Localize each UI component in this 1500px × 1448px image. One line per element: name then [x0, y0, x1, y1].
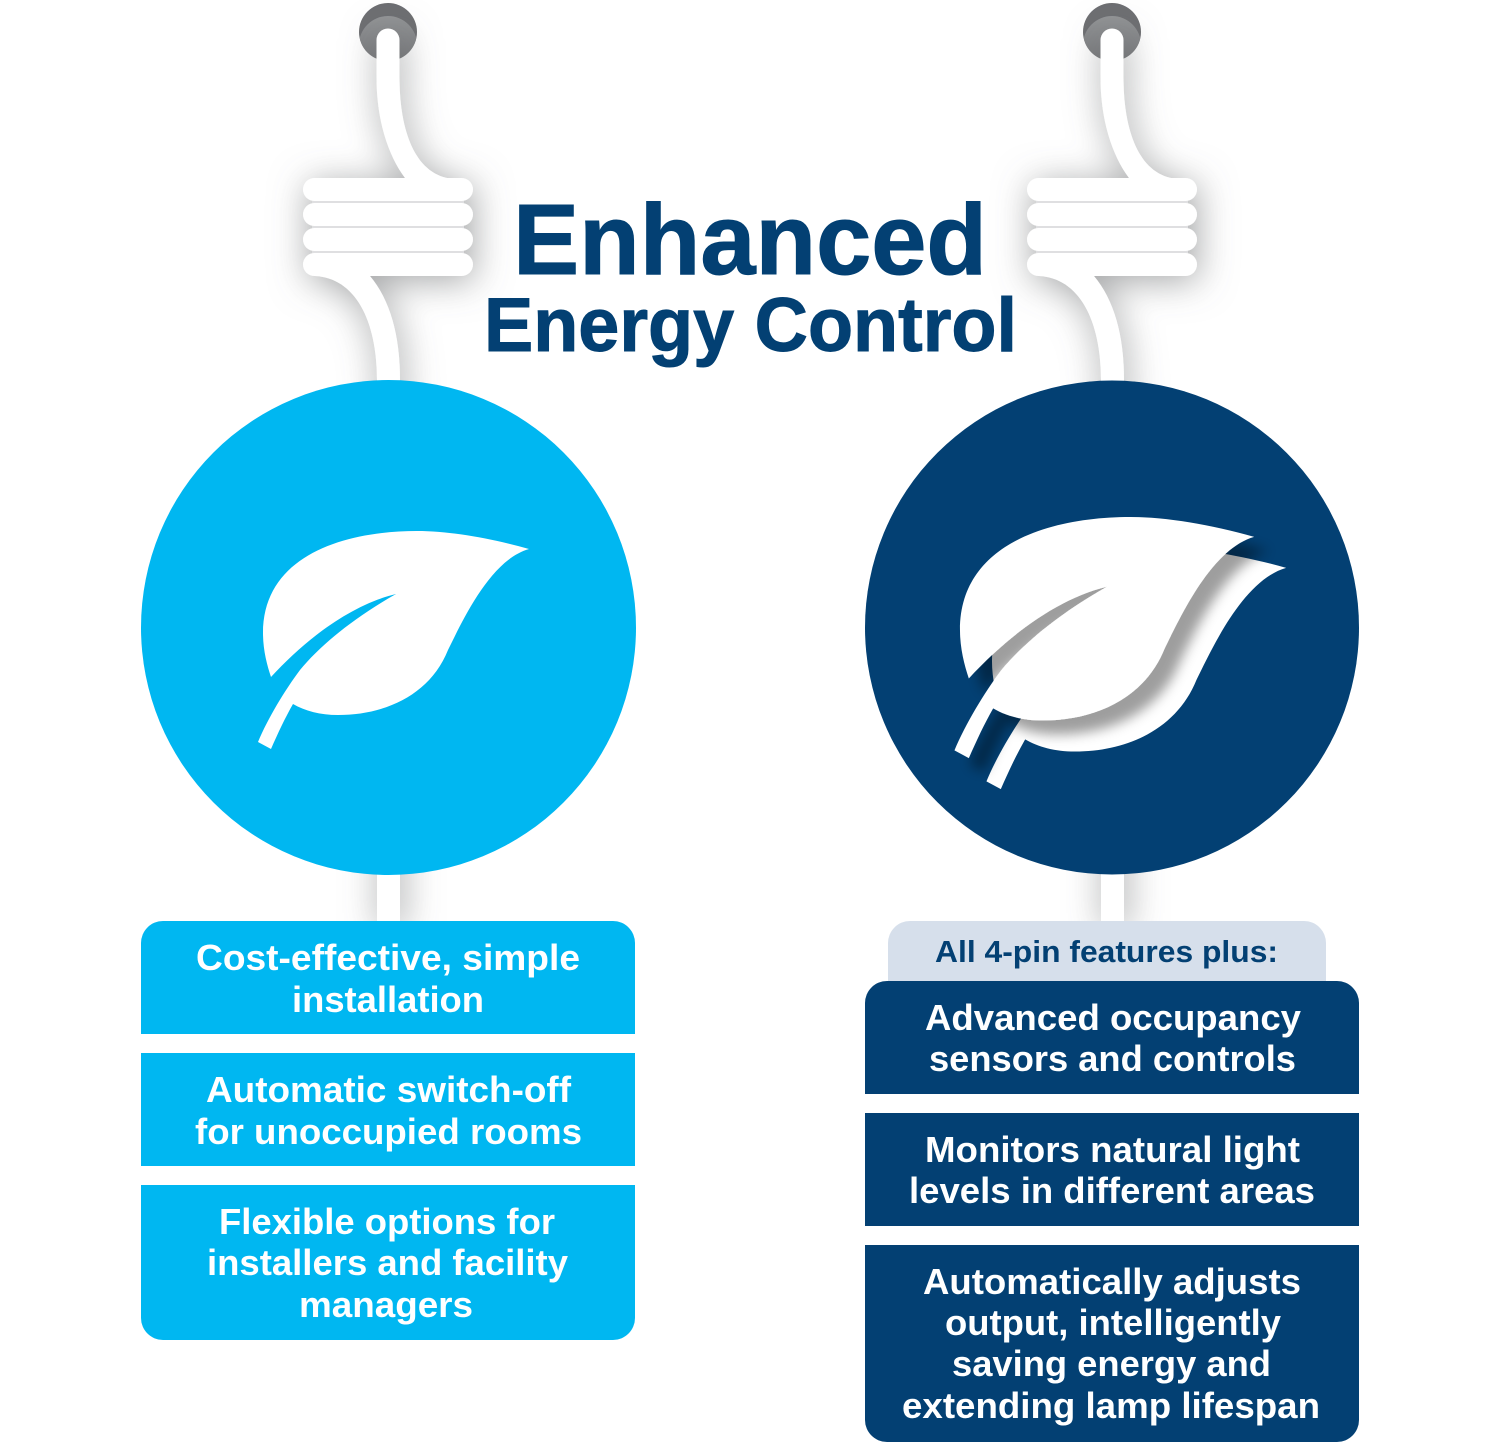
left circle: [141, 380, 636, 875]
right wire and coil: [1027, 29, 1197, 925]
left wire and coil: [303, 29, 473, 925]
right box 2: Monitors natural light: [925, 1129, 1300, 1170]
left box 1: Cost-effective, simple: [196, 937, 580, 978]
left box 3: [141, 1185, 635, 1340]
tab: all 4-pin features: All 4-pin features plus:: [935, 934, 1278, 969]
title line: Energy Control: Energy Control: [484, 283, 1017, 368]
left feature column: [141, 921, 635, 1340]
right circle: [865, 380, 1359, 874]
right box 3: Automatically adjusts: [923, 1261, 1301, 1302]
right box 3: saving energy and: [952, 1343, 1271, 1384]
left hanging wire: [303, 3, 473, 925]
title: [484, 184, 1017, 368]
left box 2: [141, 1053, 635, 1166]
left wall pin: [359, 3, 417, 58]
tab: all 4-pin features: [888, 921, 1326, 982]
back leaf: [986, 548, 1286, 789]
left box 3: Flexible options for: [219, 1201, 555, 1242]
right box 3: output, intelligently: [945, 1302, 1281, 1343]
title line: Enhanced: Enhanced: [513, 184, 987, 296]
left box 3: managers: [299, 1284, 473, 1325]
right circle with double leaf: [865, 380, 1359, 874]
right feature column: [865, 921, 1359, 1442]
left box 2: for unoccupied rooms: [195, 1111, 582, 1152]
left circle with single leaf: [141, 380, 636, 875]
right box 2: [865, 1113, 1359, 1226]
icon: double leaf: [954, 517, 1286, 789]
right box 1: sensors and controls: [929, 1038, 1296, 1079]
front leaf: [954, 517, 1254, 758]
right wall pin: [1083, 3, 1141, 58]
right hanging wire: [1027, 3, 1197, 925]
icon: single leaf: [258, 531, 529, 749]
right box 1: [865, 981, 1359, 1094]
left box 2: Automatic switch-off: [206, 1069, 572, 1110]
right box 3: [865, 1245, 1359, 1442]
left box 1: installation: [292, 979, 484, 1020]
right box 1: Advanced occupancy: [925, 997, 1301, 1038]
left box 1: [141, 921, 635, 1034]
right box 3: extending lamp lifespan: [902, 1385, 1320, 1426]
left box 3: installers and facility: [207, 1242, 568, 1283]
right box 2: levels in different areas: [909, 1170, 1315, 1211]
